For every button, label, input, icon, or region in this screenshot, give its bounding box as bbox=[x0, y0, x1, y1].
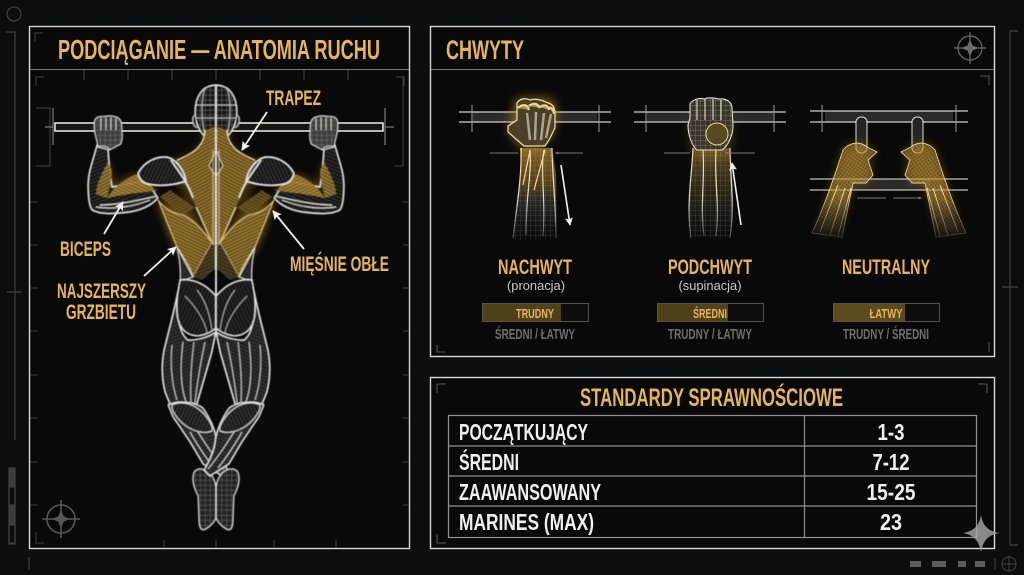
label: najszerszy grzbietu bbox=[57, 280, 146, 324]
panel: anatomy of the movement bbox=[30, 26, 410, 548]
panel frame bbox=[430, 26, 994, 356]
scale bar bbox=[910, 556, 1017, 572]
other levels: ŚREDNI / ŁATWY bbox=[495, 325, 575, 343]
label: biceps: BICEPS bbox=[60, 238, 111, 261]
arrow: trapez bbox=[242, 112, 267, 150]
row: początkujący: 1-3 bbox=[878, 419, 904, 445]
row: średni: 7-12 bbox=[872, 449, 910, 475]
subtitle: (supinacja) bbox=[678, 278, 742, 293]
difficulty meter bbox=[658, 304, 764, 322]
left hand bbox=[812, 143, 877, 237]
name: NACHWYT bbox=[498, 256, 572, 279]
name: PODCHWYT bbox=[668, 256, 752, 279]
dimension arrows bbox=[857, 197, 922, 199]
arrow: mięśnie obłe bbox=[273, 211, 304, 249]
dimension arrows bbox=[664, 152, 755, 154]
label: najszerszy grzbietu: GRZBIETU bbox=[66, 301, 136, 324]
icon: crosshair bbox=[954, 32, 986, 64]
difficulty meter: TRUDNY bbox=[516, 306, 554, 321]
bar bbox=[634, 105, 786, 132]
heading: STANDARDY SPRAWNOŚCIOWE bbox=[580, 382, 843, 412]
heading: PODCIĄGANIE — ANATOMIA RUCHU bbox=[58, 34, 380, 65]
anatomical figure bbox=[88, 85, 344, 530]
direction arrow bbox=[732, 163, 741, 225]
row: początkujący bbox=[459, 419, 904, 445]
difficulty meter bbox=[834, 304, 940, 322]
other levels: TRUDNY / ŚREDNI bbox=[843, 325, 929, 343]
icon: sparkle bbox=[963, 515, 999, 552]
subtitle: (pronacja) bbox=[507, 278, 565, 293]
row: średni: ŚREDNI bbox=[459, 448, 519, 475]
arrow: biceps bbox=[104, 202, 123, 234]
heading: CHWYTY bbox=[446, 35, 524, 65]
row: zaawansowany bbox=[459, 479, 916, 505]
row: marines bbox=[459, 509, 902, 535]
difficulty meter: ŁATWY bbox=[870, 306, 903, 321]
panel frame bbox=[30, 26, 410, 548]
arrow: najszerszy bbox=[144, 247, 176, 276]
difficulty meter bbox=[482, 304, 588, 322]
other levels: TRUDNY / ŁATWY bbox=[668, 326, 752, 343]
row: początkujący: POCZĄTKUJĄCY bbox=[459, 419, 588, 445]
right hand bbox=[901, 143, 966, 237]
panel: grips bbox=[430, 26, 994, 356]
row: zaawansowany: ZAAWANSOWANY bbox=[459, 479, 601, 505]
pull-up bar bbox=[45, 108, 394, 145]
row: średni bbox=[459, 448, 910, 475]
dimension arrows bbox=[490, 152, 583, 154]
row: marines: MARINES (MAX) bbox=[459, 509, 594, 535]
direction arrow bbox=[561, 165, 570, 225]
name: NEUTRALNY bbox=[842, 256, 930, 279]
difficulty meter: ŚREDNI bbox=[693, 306, 727, 321]
row: zaawansowany: 15-25 bbox=[866, 479, 916, 505]
label: najszerszy grzbietu: NAJSZERSZY bbox=[57, 280, 146, 303]
table bbox=[448, 416, 976, 538]
panel frame bbox=[430, 378, 994, 548]
bar bbox=[459, 105, 611, 132]
icon: compass bbox=[42, 500, 80, 538]
label: trapez: TRAPEZ bbox=[266, 87, 321, 110]
panel: fitness standards bbox=[430, 378, 994, 548]
bars bbox=[810, 105, 968, 190]
row: marines: 23 bbox=[880, 509, 902, 535]
hand bbox=[508, 98, 557, 240]
label: mięśnie obłe: MIĘŚNIE OBŁE bbox=[290, 252, 389, 276]
grip: neutralny bbox=[810, 105, 968, 343]
grip: podchwyt bbox=[634, 98, 786, 343]
hand bbox=[688, 98, 733, 238]
grip: nachwyt bbox=[459, 98, 611, 343]
